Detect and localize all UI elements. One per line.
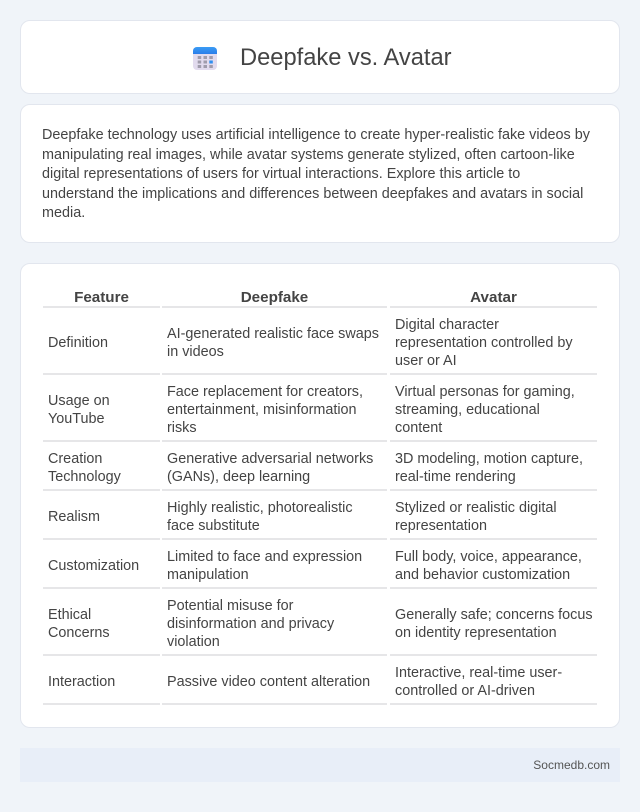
text: Limited to face and expression <box>167 549 362 565</box>
text: Customization <box>48 558 139 574</box>
intro text: understand the implications and differences between deepfakes and avatars in social <box>42 186 583 202</box>
text: Virtual personas for gaming, <box>395 384 575 400</box>
text: risks <box>167 420 197 436</box>
panel: introduction <box>20 104 620 243</box>
header: Feature: Feature <box>74 289 129 306</box>
row: Definition <box>43 317 597 375</box>
text: Stylized or realistic digital <box>395 500 557 516</box>
header: Avatar: Avatar <box>470 289 517 306</box>
intro text: Deepfake technology uses artificial intelligence to create hyper-realistic fake videos by <box>42 127 590 143</box>
table header <box>43 289 597 308</box>
row: Creation Technology <box>43 451 597 491</box>
text: Highly realistic, photorealistic <box>167 500 353 516</box>
text: Full body, voice, appearance, <box>395 549 582 565</box>
text: entertainment, misinformation <box>167 402 357 418</box>
text: real-time rendering <box>395 469 516 485</box>
text: Ethical <box>48 607 91 623</box>
text: violation <box>167 634 220 650</box>
text: user or AI <box>395 353 457 369</box>
text: content <box>395 420 442 436</box>
text: Interactive, real-time user- <box>395 665 562 681</box>
row: Usage on YouTube <box>43 384 597 442</box>
icon: calendar <box>193 47 217 70</box>
header: Deepfake: Deepfake <box>241 289 308 306</box>
text: on identity representation <box>395 625 557 641</box>
text: Realism <box>48 509 100 525</box>
text: streaming, educational <box>395 402 540 418</box>
panel: title card <box>20 20 620 94</box>
text: YouTube <box>48 411 105 427</box>
text: representation controlled by <box>395 335 573 351</box>
row: Ethical Concerns <box>43 598 597 656</box>
title: Deepfake vs. Avatar <box>240 45 452 71</box>
text: Technology <box>48 469 121 485</box>
row: Customization <box>43 549 597 589</box>
text: Creation <box>48 451 102 467</box>
intro text: media. <box>42 205 85 221</box>
text: Concerns <box>48 625 110 641</box>
text: disinformation and privacy <box>167 616 334 632</box>
text: controlled or AI-driven <box>395 683 535 699</box>
text: Definition <box>48 335 108 351</box>
text: Passive video content alteration <box>167 674 370 690</box>
text: Generally safe; concerns focus <box>395 607 593 623</box>
intro text <box>42 127 590 221</box>
row: Realism <box>43 500 597 540</box>
intro text: manipulating real images, while avatar systems generate stylized, often cartoon-like <box>42 147 575 163</box>
text: in videos <box>167 344 224 360</box>
text: AI-generated realistic face swaps <box>167 326 379 342</box>
text: representation <box>395 518 487 534</box>
text: and behavior customization <box>395 567 570 583</box>
text: Digital character <box>395 317 499 333</box>
text: Face replacement for creators, <box>167 384 363 400</box>
text: manipulation <box>167 567 249 583</box>
panel: comparison table <box>20 263 620 728</box>
text: (GANs), deep learning <box>167 469 310 485</box>
text: face substitute <box>167 518 260 534</box>
text: Usage on <box>48 393 110 409</box>
footer text: Socmedb.com <box>533 758 610 772</box>
text: Potential misuse for <box>167 598 293 614</box>
intro text: digital representations of users for virtual interactions. Explore this article to <box>42 166 520 182</box>
text: Interaction <box>48 674 115 690</box>
text: Generative adversarial networks <box>167 451 373 467</box>
footer bar <box>20 748 620 782</box>
text: 3D modeling, motion capture, <box>395 451 583 467</box>
row: Interaction <box>43 665 597 705</box>
